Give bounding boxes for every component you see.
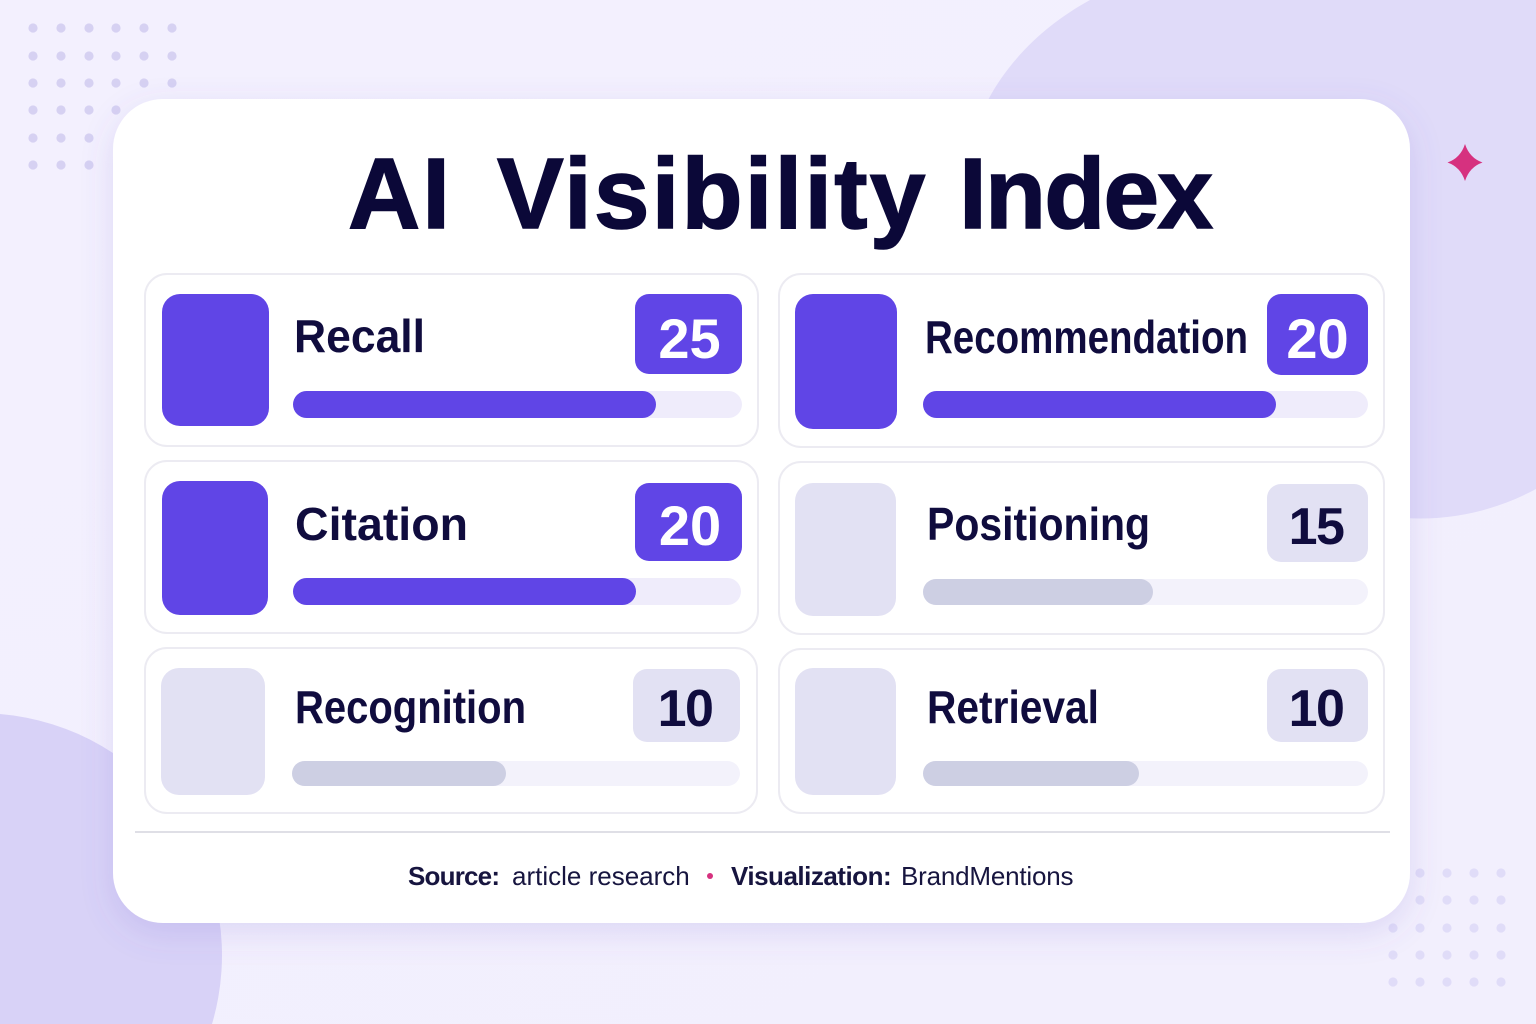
bar: Recall (293, 391, 742, 418)
title: Index (959, 138, 1212, 250)
bar: Recognition (292, 761, 740, 786)
score badge: Retrieval 10 (1267, 669, 1368, 742)
panel: Recognition (145, 648, 757, 813)
score badge: Recognition 10 (633, 669, 740, 742)
decorative blob: top right (988, 0, 1536, 519)
footer: visualization: BrandMentions (901, 861, 1073, 891)
panel: Retrieval (779, 649, 1384, 813)
bar: Recommendation (923, 391, 1368, 418)
bar: Positioning (923, 579, 1368, 605)
label: Retrieval: Retrieval (927, 681, 1099, 733)
score badge: Citation 20: 20 (659, 494, 721, 557)
icon tile: Recall (162, 294, 269, 426)
footer: source: article research (512, 861, 690, 891)
score badge: Recommendation 20 (1267, 294, 1368, 375)
footer: separator dot (707, 873, 713, 879)
dot grid: bottom right (1388, 868, 1506, 987)
score badge: Retrieval 10: 10 (1289, 680, 1343, 738)
icon tile: Citation (162, 481, 268, 615)
main card (113, 99, 1410, 923)
bar: Citation (293, 578, 741, 605)
panel: Recommendation (779, 274, 1384, 447)
label: Positioning: Positioning (927, 498, 1150, 550)
score badge: Recommendation 20: 20 (1286, 307, 1349, 370)
bar: Retrieval (923, 761, 1368, 786)
icon tile: Retrieval (795, 668, 896, 795)
label: Recognition: Recognition (295, 681, 526, 733)
score badge: Positioning 15 (1267, 484, 1368, 562)
score badge: Recognition 10: 10 (658, 680, 712, 738)
panel: Citation (145, 461, 758, 633)
decorative blob: bottom left (0, 714, 222, 1024)
label: Recommendation: Recommendation (925, 311, 1248, 363)
dot grid: top left (28, 23, 177, 170)
panel: Positioning (779, 462, 1384, 634)
score badge: Recall 25: 25 (658, 307, 721, 370)
title: AI (348, 138, 452, 250)
footer: visualization: Visualization: (731, 861, 891, 891)
score badge: Positioning 15: 15 (1289, 498, 1344, 556)
score badge: Citation 20 (635, 483, 742, 561)
footer: source: Source: (408, 861, 499, 891)
icon tile: Positioning (795, 483, 896, 616)
icon tile: Recommendation (795, 294, 897, 429)
icon: pink sparkle (1448, 144, 1482, 181)
icon tile: Recognition (161, 668, 265, 795)
score badge: Recall 25 (635, 294, 742, 374)
panel: Recall (145, 274, 758, 446)
label: Recall: Recall (294, 310, 425, 362)
title: Visibility (497, 138, 927, 250)
label: Citation: Citation (295, 498, 468, 550)
